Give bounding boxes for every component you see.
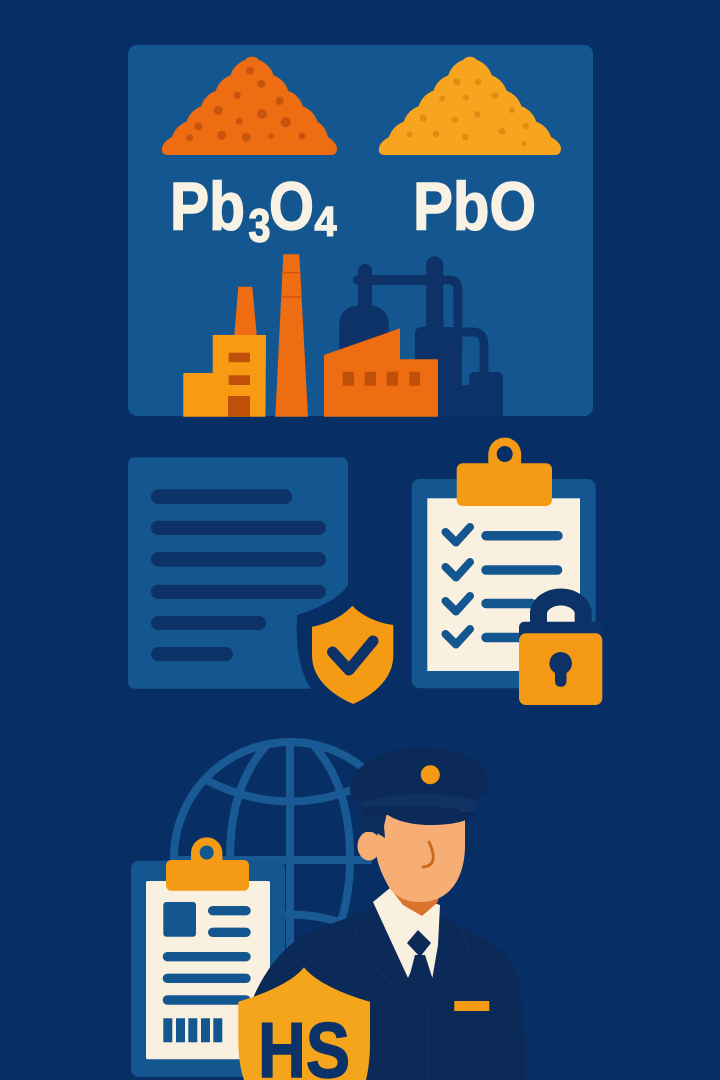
officer cap: [350, 747, 489, 825]
document sheet: [128, 457, 348, 689]
necktie: [407, 930, 433, 992]
icon: refinery towers and pipes: [339, 256, 503, 417]
panel: checklist clipboard with padlock: [412, 438, 602, 705]
icon: orange factory hall: [324, 328, 438, 417]
nose: [423, 842, 433, 867]
checklist lines: [481, 531, 563, 642]
customs officer figure: [250, 747, 526, 1080]
form paper: [146, 881, 270, 1059]
uniform badge: [454, 1001, 489, 1011]
document text lines: [151, 489, 326, 661]
clipboard clip: [457, 438, 552, 506]
neck shadow: [390, 888, 440, 916]
label: Pb3O4 formula: O: [269, 168, 314, 244]
icon: small yellow factory with chimney: [183, 287, 266, 417]
panel: lead oxide products and factory: [128, 45, 593, 417]
icon: tall chimney: [275, 254, 308, 417]
form barcode: [163, 1018, 222, 1042]
shirt collar: [373, 888, 440, 980]
label: PbO formula: PbO: [413, 168, 536, 244]
panel: customs officer with HS code: [131, 742, 526, 1080]
shield: HS code: [238, 967, 370, 1080]
hair: [362, 808, 388, 838]
ear: [358, 832, 380, 860]
icon: globe: [172, 742, 406, 974]
checklist paper: [427, 498, 580, 671]
icon: orange Pb3O4 powder pile: [162, 57, 337, 155]
clipboard board: [412, 479, 596, 688]
panel: compliance document with shield: [128, 457, 393, 704]
checklist ticks: [446, 527, 470, 644]
label: Pb3O4 formula: [170, 168, 337, 252]
face: [376, 810, 465, 902]
icon: yellow PbO powder pile: [379, 57, 561, 155]
label: Pb3O4 formula: 4: [314, 198, 337, 245]
label: Pb3O4 formula: Pb: [170, 168, 245, 244]
form photo and text lines: [163, 902, 251, 1005]
clipboard: declaration form: [131, 837, 285, 1077]
panel background: [128, 45, 593, 416]
icon: shield with check: [312, 606, 393, 704]
form clip: [166, 837, 249, 891]
uniform lapels: [353, 925, 468, 1080]
form board: [131, 861, 285, 1077]
label: Pb3O4 formula: 3: [248, 200, 270, 252]
officer uniform: [250, 905, 526, 1080]
icon: padlock: [519, 597, 602, 705]
